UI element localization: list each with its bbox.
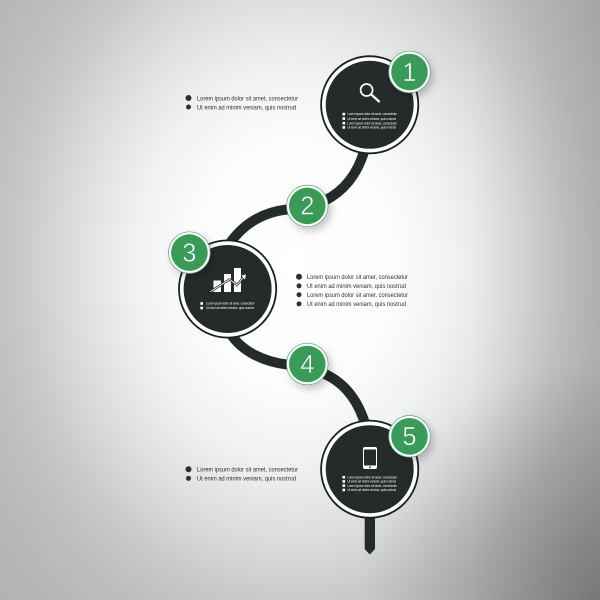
badge 2 — [286, 185, 328, 227]
badge 5: 5 — [402, 423, 417, 451]
step 1 mini list: Lorem ipsum dolor sit amet, consectetur — [348, 121, 398, 125]
badge 4 — [286, 343, 328, 385]
badge 4: 4 — [300, 351, 314, 379]
step 5 mini list: Ut enim ad minim veniam, quis nostrud — [348, 480, 396, 484]
text block: step 3: Ut enim ad minim veniam, quis nostrud — [307, 301, 406, 308]
text block: step 1 — [186, 95, 299, 111]
badge 2: 2 — [300, 192, 314, 220]
step 5 node — [321, 421, 418, 518]
step 1 node — [321, 56, 418, 153]
badge 3 — [169, 232, 210, 273]
step 3 node — [179, 240, 276, 338]
badge 1: 1 — [402, 59, 417, 87]
step 1 mini list: Ut enim ad minim veniam, quis nostrud — [348, 126, 396, 130]
badge 5 — [389, 416, 430, 457]
step 5 mini list: Lorem ipsum dolor sit amet, consectetur — [348, 475, 398, 479]
step 3 mini list: Lorem ipsum dolor sit amet, consectetur — [206, 302, 255, 306]
text block: step 1: Lorem ipsum dolor sit amet, consectetur — [197, 95, 299, 102]
badge 1 — [389, 51, 430, 93]
text block: step 3: Lorem ipsum dolor sit amet, consectetur — [307, 292, 409, 299]
connector path — [230, 150, 366, 425]
text block: step 5: Lorem ipsum dolor sit amet, consectetur — [197, 466, 299, 474]
step 5 mini list: Lorem ipsum dolor sit amet, consectetur — [348, 484, 398, 488]
badge 3: 3 — [182, 240, 196, 268]
text block: step 3 — [296, 274, 409, 308]
step 3 mini list — [200, 302, 255, 310]
icon: magnifier — [361, 84, 380, 102]
step 1 mini list — [342, 112, 398, 130]
step 3 mini list: Ut enim ad minim veniam, quis nostrud — [206, 306, 254, 310]
step 1 mini list: Lorem ipsum dolor sit amet, consectetur — [348, 112, 398, 116]
text block: step 5 — [186, 466, 299, 483]
icon: smartphone — [363, 447, 377, 469]
text block: step 3: Ut enim ad minim veniam, quis nostrud — [307, 283, 406, 290]
step 1 mini list: Ut enim ad minim veniam, quis nostrud — [348, 117, 396, 121]
text block: step 3: Lorem ipsum dolor sit amet, consectetur — [307, 274, 409, 281]
icon: bar chart — [210, 268, 246, 292]
text block: step 5: Ut enim ad minim veniam, quis nostrud — [197, 476, 296, 483]
step 5 mini list — [342, 475, 398, 492]
step 5 mini list: Ut enim ad minim veniam, quis nostrud — [348, 488, 396, 492]
text block: step 1: Ut enim ad minim veniam, quis nostrud — [197, 104, 296, 111]
connector tail — [365, 515, 375, 554]
